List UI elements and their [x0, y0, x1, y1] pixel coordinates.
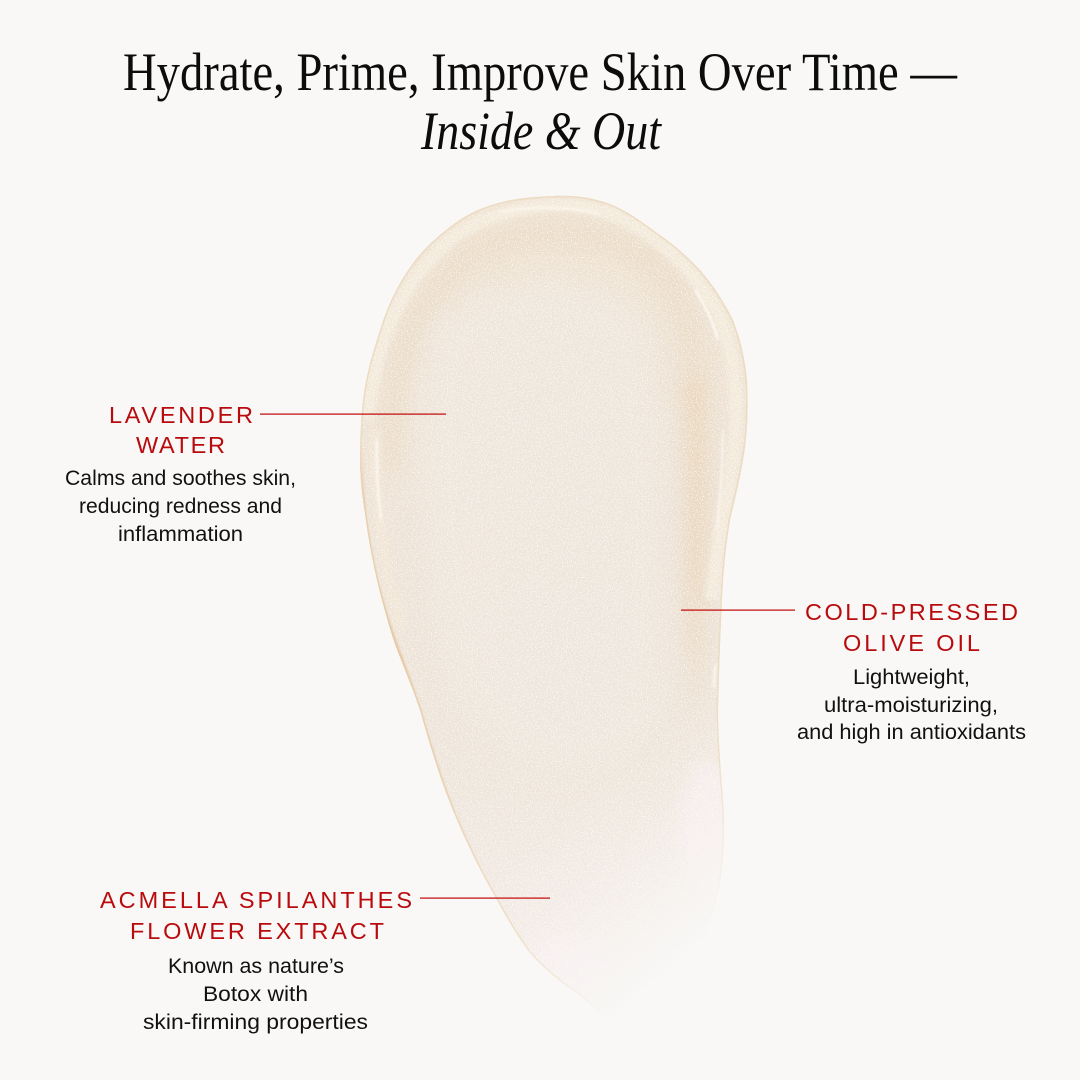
heading: lavender water — [109, 402, 253, 458]
text: lavender water description — [65, 466, 296, 546]
highlights — [695, 290, 718, 340]
title: Hydrate, Prime, Improve Skin Over Time — — [123, 42, 958, 102]
cream smear — [360, 196, 748, 1004]
heading: acmella: FLOWER EXTRACT — [130, 918, 384, 944]
leader line: olive oil — [681, 610, 795, 611]
text: acmella description: Known as nature’s — [168, 954, 344, 978]
pale lit left rim — [375, 430, 402, 630]
text: olive oil description — [797, 665, 1026, 744]
shimmer centre — [434, 289, 646, 472]
text: lavender water description: Calms and soothes skin, — [65, 466, 296, 490]
leader line: lavender water — [260, 414, 446, 415]
heading: olive oil: COLD-PRESSED — [805, 599, 1018, 625]
shimmer grain — [474, 766, 716, 928]
callout: cold-pressed olive oil — [681, 599, 1026, 744]
tan left edge — [360, 454, 469, 842]
pale outer rim — [368, 205, 736, 600]
warm crisp edge — [360, 196, 748, 1030]
text: acmella description: skin-firming properties — [143, 1010, 368, 1034]
pink fade — [686, 765, 722, 822]
warm inner band, top — [392, 233, 698, 470]
heading: lavender water: WATER — [136, 432, 225, 458]
heading: acmella — [100, 887, 412, 944]
callout: acmella spilanthes flower extract — [100, 887, 550, 1034]
text: olive oil description: ultra-moisturizing, — [824, 693, 998, 717]
text: olive oil description: Lightweight, — [853, 665, 970, 689]
heading: acmella: ACMELLA SPILANTHES — [100, 887, 412, 913]
title — [123, 42, 958, 161]
warm inner band, right — [692, 380, 698, 730]
heading: lavender water: LAVENDER — [109, 402, 253, 428]
text: acmella description: Botox with — [203, 982, 308, 1006]
leader line: acmella — [420, 898, 550, 899]
heading: olive oil: OLIVE OIL — [843, 630, 980, 656]
text: lavender water description: inflammation — [118, 522, 243, 546]
callout: lavender water — [65, 402, 446, 546]
text: lavender water description: reducing redness and — [79, 494, 282, 518]
text: acmella description — [143, 954, 368, 1034]
title: Inside & Out — [420, 101, 663, 161]
text: olive oil description: and high in antioxidants — [797, 720, 1026, 744]
heading: olive oil — [805, 599, 1018, 656]
